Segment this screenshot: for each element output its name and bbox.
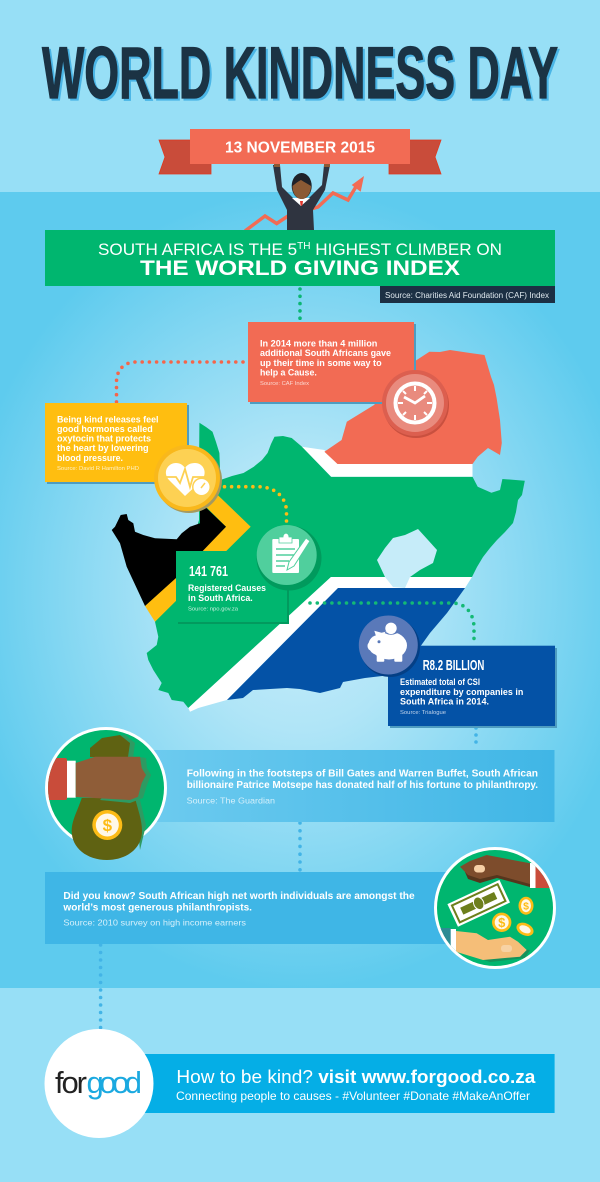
- icon: heart: [154, 445, 222, 513]
- panel: Patrice Motsepe donation: billionaire Patrice Motsepe has donated half of his fortune to philanthropy.: [187, 779, 538, 791]
- dotted connector: between panels: [298, 823, 302, 871]
- panel: registered causes: in South Africa.: [188, 593, 253, 603]
- dotted connector: yellow: [224, 487, 286, 521]
- panel: Patrice Motsepe donation: Following in the footsteps of Bill Gates and Warren Buffet, South African: [187, 768, 538, 780]
- rising arrow: [245, 176, 364, 231]
- icon: clipboard: [256, 525, 322, 590]
- headline banner: TH: [297, 241, 311, 252]
- panel: CSI expenditure: R8.2 BILLION: [423, 657, 484, 674]
- map: coral region: [324, 350, 502, 464]
- headline banner: [45, 230, 555, 286]
- panel: registered causes: [176, 551, 289, 624]
- dotted connector: coral: [116, 362, 243, 402]
- footer banner: Connecting people to causes - #Volunteer #Donate #MakeAnOffer: [176, 1089, 530, 1103]
- map: white band diagonal: [188, 577, 472, 712]
- panel: did you know: Did you know? South African high net worth individuals are amongst the: [63, 890, 415, 902]
- dotted connector: green to blue box: [310, 603, 474, 644]
- footer banner: How to be kind? visit www.forgood.co.za: [176, 1067, 536, 1087]
- icon: piggy bank: [359, 616, 420, 677]
- source tag: [380, 286, 555, 303]
- panel: oxytocin: [45, 403, 189, 484]
- panel: volunteers: Source: CAF Index: [260, 381, 309, 387]
- panel: Patrice Motsepe donation: [100, 750, 554, 822]
- map: Lesotho: [377, 529, 437, 588]
- panel: did you know: [45, 872, 475, 944]
- map: blue region: [227, 588, 465, 700]
- panel: oxytocin: good hormones called: [57, 424, 153, 434]
- dotted connector: blue box to panel: [474, 728, 478, 749]
- headline banner: SOUTH AFRICA IS THE 5: [98, 240, 296, 259]
- footer banner: [144, 1054, 555, 1113]
- panel: Patrice Motsepe donation: Source: The Guardian: [187, 796, 275, 806]
- icon: clock: [382, 370, 449, 438]
- background: top band: [0, 0, 600, 192]
- logo: forgood: [44, 1029, 154, 1138]
- icon: hands exchanging money: [434, 847, 560, 969]
- source tag: Source: Charities Aid Foundation (CAF) Index: [385, 291, 549, 300]
- ribbon date banner: 13 NOVEMBER 2015: [225, 140, 375, 156]
- map: green region: [147, 423, 525, 708]
- background: middle band: [0, 192, 600, 988]
- map: white band top: [302, 447, 472, 477]
- panel: did you know: world’s most generous philanthropists.: [62, 902, 252, 914]
- panel: oxytocin: blood pressure.: [57, 453, 123, 463]
- headline banner: THE WORLD GIVING INDEX: [140, 256, 461, 280]
- logo: forgood: for: [55, 1065, 87, 1100]
- panel: volunteers: up their time in some way to: [260, 358, 382, 368]
- panel: CSI expenditure: [388, 646, 557, 728]
- icon: hand holding money bag: [45, 727, 167, 860]
- background: bottom band: [0, 988, 600, 1182]
- panel: registered causes: 141 761: [189, 563, 228, 580]
- panel: did you know: Source: 2010 survey on high income earners: [63, 918, 246, 928]
- panel: CSI expenditure: South Africa in 2014.: [400, 696, 489, 706]
- person holding banner: [273, 162, 330, 230]
- map: yellow chevron: [145, 477, 251, 622]
- panel: volunteers: In 2014 more than 4 million: [260, 338, 377, 348]
- panel: CSI expenditure: Source: Trialogue: [400, 710, 446, 716]
- panel: CSI expenditure: expenditure by companies in: [400, 687, 523, 697]
- panel: registered causes: Registered Causes: [188, 583, 266, 593]
- panel: registered causes: Source: npo.gov.za: [188, 606, 239, 612]
- logo: forgood: good: [86, 1065, 142, 1100]
- panel: oxytocin: Source: David R Hamilton PHD: [57, 466, 139, 472]
- panel: oxytocin: Being kind releases feel: [57, 414, 158, 424]
- panel: oxytocin: oxytocin that protects: [57, 434, 151, 444]
- icon: hands exchanging money: $: [523, 900, 529, 912]
- icon: hand holding money bag: $: [103, 816, 113, 835]
- map of South Africa: [112, 350, 525, 712]
- panel: volunteers: additional South Africans gave: [260, 348, 391, 358]
- dotted connector: to logo: [99, 945, 102, 1028]
- map: black region: [112, 507, 226, 606]
- icon: hands exchanging money: $: [498, 915, 506, 930]
- headline banner: HIGHEST CLIMBER ON: [311, 240, 502, 259]
- panel: CSI expenditure: Estimated total of CSI: [400, 677, 480, 687]
- panel: volunteers: [248, 322, 416, 404]
- panel: oxytocin: the heart by lowering: [57, 443, 149, 453]
- dotted connector: green top: [298, 289, 302, 322]
- panel: volunteers: help a Cause.: [260, 368, 317, 378]
- ribbon date banner: [159, 129, 441, 174]
